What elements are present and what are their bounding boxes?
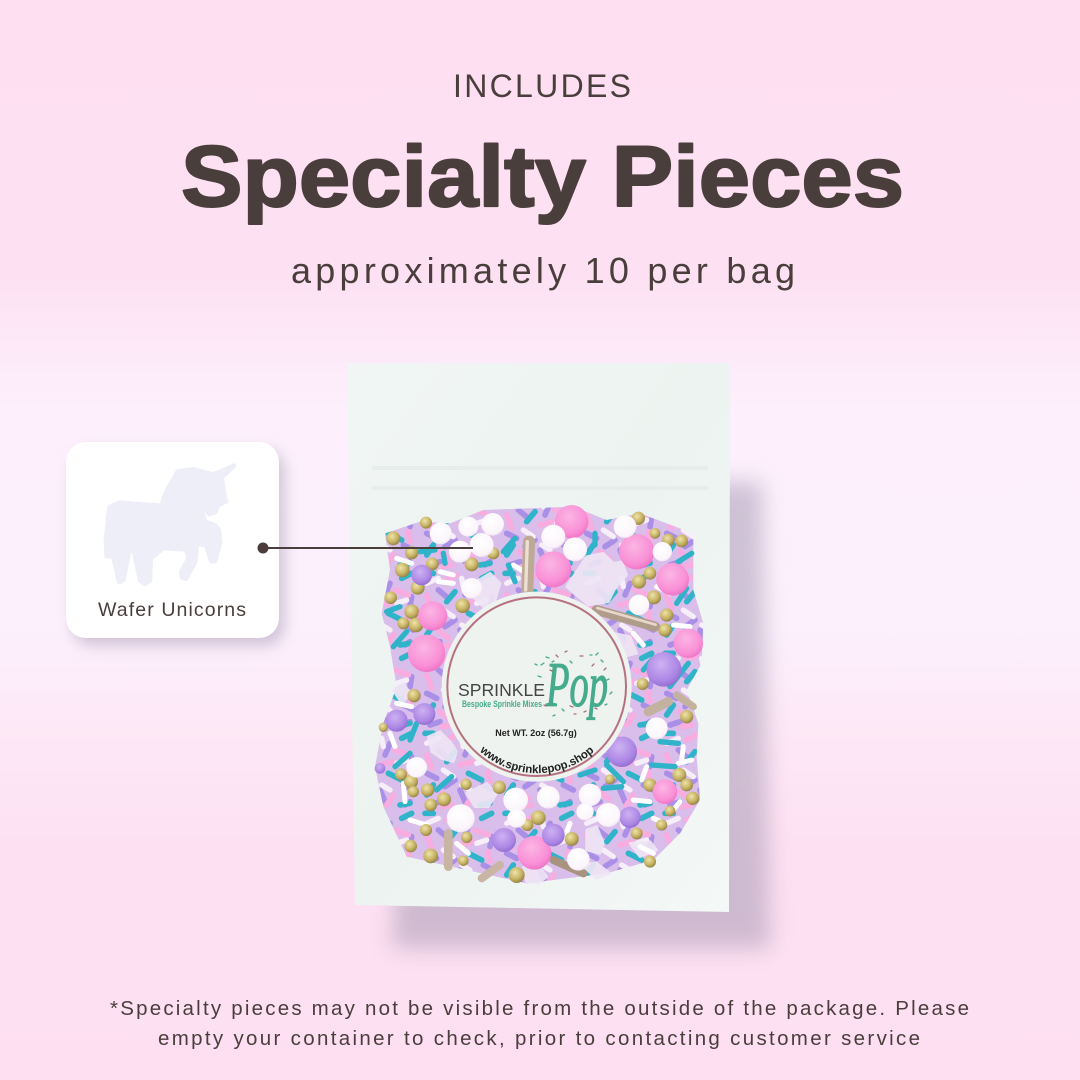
sprinkle seed label bbox=[442, 592, 632, 782]
label ring bbox=[447, 597, 626, 776]
gold rods bbox=[448, 542, 693, 878]
card label: Wafer Unicorns bbox=[98, 599, 246, 621]
teal sprinkles bbox=[387, 533, 692, 790]
leader line bbox=[258, 542, 473, 554]
brand: sprinkle: SPRINKLE bbox=[458, 680, 545, 700]
zipper bbox=[372, 466, 708, 490]
sprinkle base bbox=[375, 507, 703, 883]
wafer unicorn pieces bbox=[393, 553, 657, 883]
brand: pop: Pop bbox=[545, 649, 608, 720]
label disc bbox=[442, 592, 632, 782]
white sprinkles bbox=[390, 558, 692, 853]
sprinkle window bbox=[375, 505, 703, 883]
purple pearls bbox=[375, 565, 681, 852]
product bag bbox=[347, 363, 780, 958]
callout card: wafer unicorns bbox=[66, 442, 285, 646]
tagline: Bespoke Sprinkle Mixes bbox=[462, 699, 542, 710]
card bbox=[72, 450, 285, 646]
pink pearls bbox=[408, 505, 703, 870]
title: Specialty Pieces bbox=[181, 129, 904, 225]
net weight: Net WT. 2oz (56.7g) bbox=[495, 728, 577, 738]
bag body bbox=[347, 363, 730, 912]
confetti bbox=[535, 653, 612, 716]
white pearls bbox=[406, 513, 672, 871]
footnote bbox=[110, 997, 969, 1050]
subtitle: approximately 10 per bag bbox=[291, 250, 795, 291]
gold dragees bbox=[379, 512, 699, 883]
label text bbox=[458, 649, 613, 775]
footnote: *Specialty pieces may not be visible from the outside of the package. Please bbox=[110, 997, 969, 1020]
footnote: empty your container to check, prior to contacting customer service bbox=[158, 1027, 920, 1050]
website: www.sprinklepop.shop bbox=[480, 746, 594, 775]
icon: unicorn bbox=[106, 466, 234, 584]
bag shadow bbox=[392, 482, 770, 948]
heading: includes: INCLUDES bbox=[453, 68, 631, 104]
